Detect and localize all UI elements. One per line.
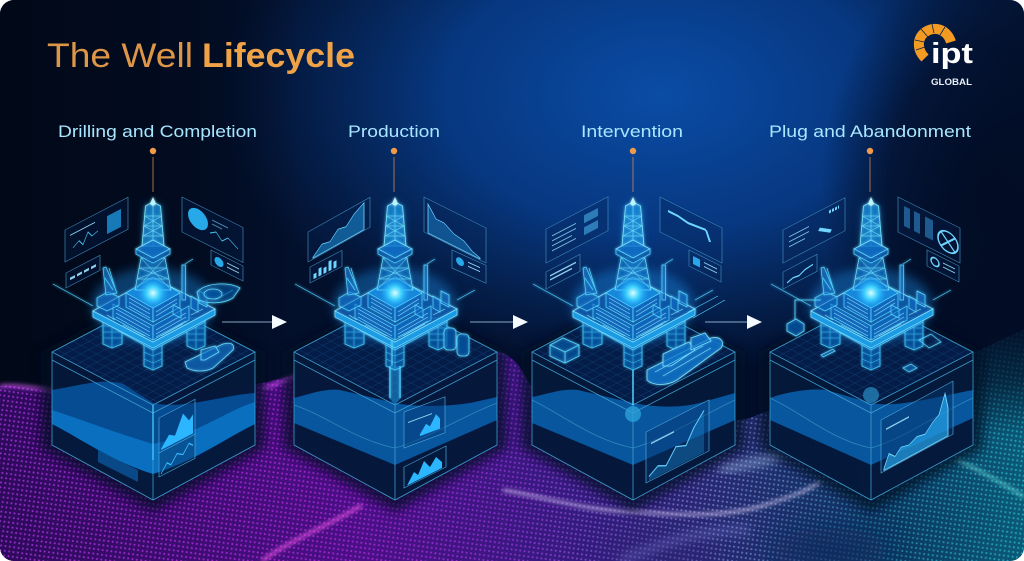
ground block: strata <box>531 324 736 500</box>
plugged well marker <box>863 387 879 403</box>
panel: Production rig block <box>283 197 507 512</box>
ground block: strata <box>769 324 974 500</box>
step label: Plug and Abandonment <box>769 122 971 192</box>
floating data panels <box>783 197 960 289</box>
title <box>48 42 354 74</box>
floating data panels <box>65 197 243 288</box>
containers <box>550 338 579 363</box>
logo: ipt global <box>915 24 973 88</box>
floating data panels <box>308 197 486 283</box>
logo: ipt global: ipt <box>931 38 973 70</box>
panel: Drilling and Completion rig block <box>41 197 265 512</box>
panel: Plug and Abandonment rig block <box>759 197 983 512</box>
ground block: strata <box>51 324 256 500</box>
step label: Production <box>348 122 440 192</box>
chart panel on block face <box>646 400 709 483</box>
arrow: production to intervention <box>470 315 528 329</box>
chart panels on block face <box>159 399 195 477</box>
step label: Drilling and Completion: Drilling and Completion <box>58 122 257 141</box>
supply ship <box>185 343 234 371</box>
title: The Well <box>47 37 193 75</box>
offshore rig <box>771 197 951 370</box>
ground block: strata <box>293 324 498 500</box>
panel: Intervention rig block <box>521 197 745 512</box>
logo: ipt global: GLOBAL <box>931 77 972 88</box>
arrow: drilling to production <box>222 315 287 329</box>
step label: Drilling and Completion <box>58 122 257 192</box>
offshore rig <box>53 197 233 370</box>
step label: Intervention: Intervention <box>581 122 683 141</box>
seabed equipment <box>821 334 941 372</box>
chart panel on block face <box>881 381 953 473</box>
title: Lifecycle <box>202 37 355 75</box>
helideck vessel <box>197 284 240 303</box>
step label: Intervention <box>581 122 683 192</box>
intervention vessel <box>647 333 723 384</box>
dotted wave landscape <box>0 330 1024 561</box>
storage tanks <box>444 328 469 356</box>
crane arm and removed module <box>787 300 821 336</box>
well target marker <box>625 370 641 422</box>
floating data panels <box>546 197 722 289</box>
wellbore <box>390 340 400 398</box>
offshore rig <box>533 197 713 370</box>
arrow: intervention to plug and abandonment <box>705 315 762 329</box>
offshore rig <box>295 197 475 370</box>
step label: Plug and Abandonment: Plug and Abandonment <box>769 122 971 141</box>
pipelines <box>688 296 725 318</box>
chart panels on block face <box>404 397 446 488</box>
step label: Production: Production <box>348 122 440 141</box>
